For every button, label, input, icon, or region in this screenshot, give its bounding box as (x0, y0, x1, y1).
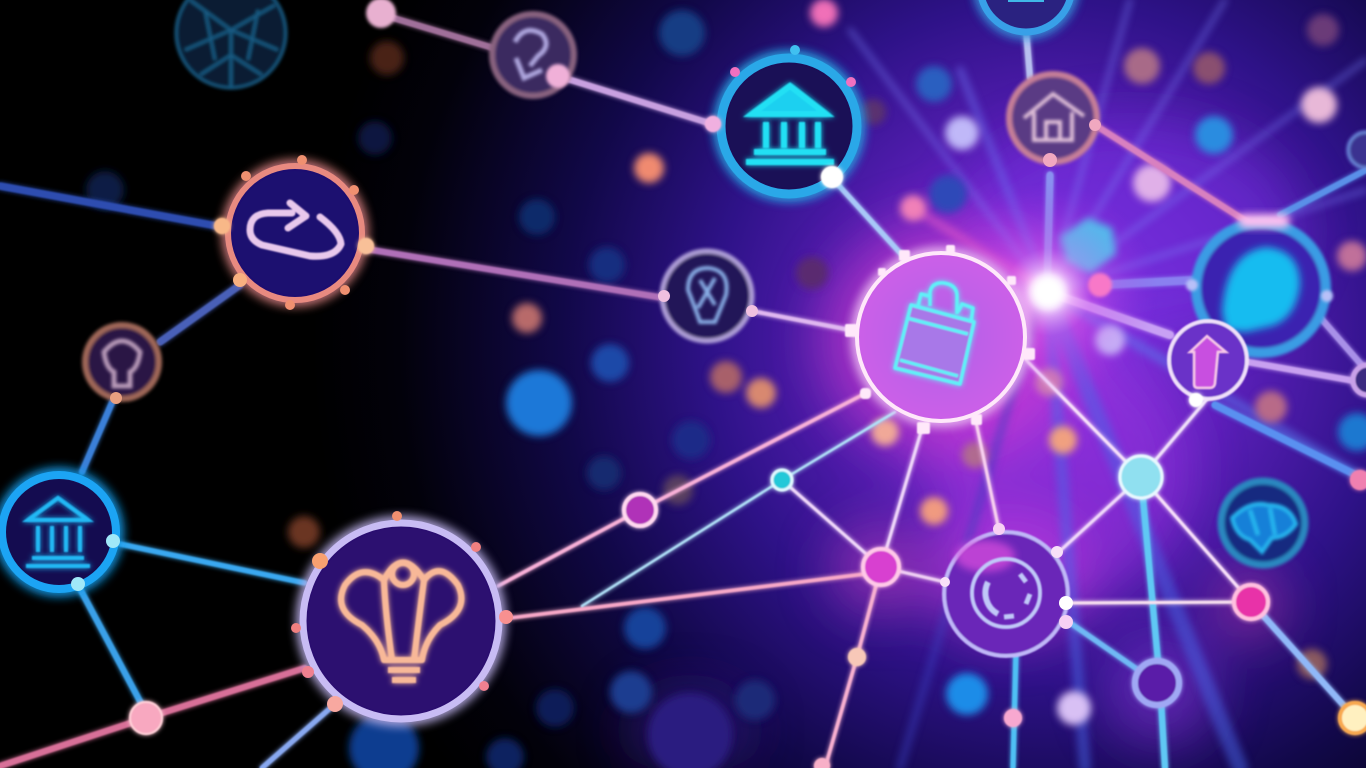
node: circular arrows (940, 523, 1073, 656)
icon: lock (895, 283, 974, 384)
node: bank top (705, 45, 857, 194)
node: right edge circle (1348, 132, 1366, 490)
light rays from burst (850, 0, 1366, 768)
icon: bulb (341, 562, 461, 680)
junction: blush (130, 702, 162, 734)
node: small bulb (85, 325, 159, 404)
junction: light cyan (1120, 456, 1162, 498)
junction: pink (863, 549, 899, 585)
icon: rotating ring (972, 559, 1040, 627)
junction: bottom (814, 758, 830, 768)
icon: bank (746, 86, 834, 162)
small junction nodes (130, 456, 1366, 768)
node: brain bulb (658, 251, 758, 341)
node: central lock (845, 245, 1035, 434)
node: arrow loop (214, 155, 374, 310)
node: geometric cyan shape (1060, 218, 1116, 274)
magenta and purple haze (630, 120, 1300, 768)
junction: red pink (1234, 585, 1268, 619)
node: phone icon (1169, 321, 1247, 407)
junction: pink small (1004, 709, 1022, 727)
junction: orange glow (1340, 703, 1366, 733)
blurred geodesic sphere (176, 0, 286, 88)
icon: bank (26, 498, 90, 566)
node: cyan head (1186, 214, 1333, 353)
junction: magenta (624, 494, 656, 526)
icon: phone (1190, 336, 1226, 388)
junction: peach (848, 648, 866, 666)
node: question icon (366, 0, 574, 96)
node: top cut-off circle (980, 0, 1072, 32)
junction: teal (772, 470, 792, 490)
node: swirl (1221, 481, 1305, 565)
junction: purple ring (1135, 661, 1179, 705)
node: bank left (2, 475, 120, 591)
node: home icon (1009, 74, 1101, 167)
burst of light (938, 182, 1158, 402)
icon: loop arrow (250, 203, 341, 256)
node: big light bulb (291, 511, 513, 719)
